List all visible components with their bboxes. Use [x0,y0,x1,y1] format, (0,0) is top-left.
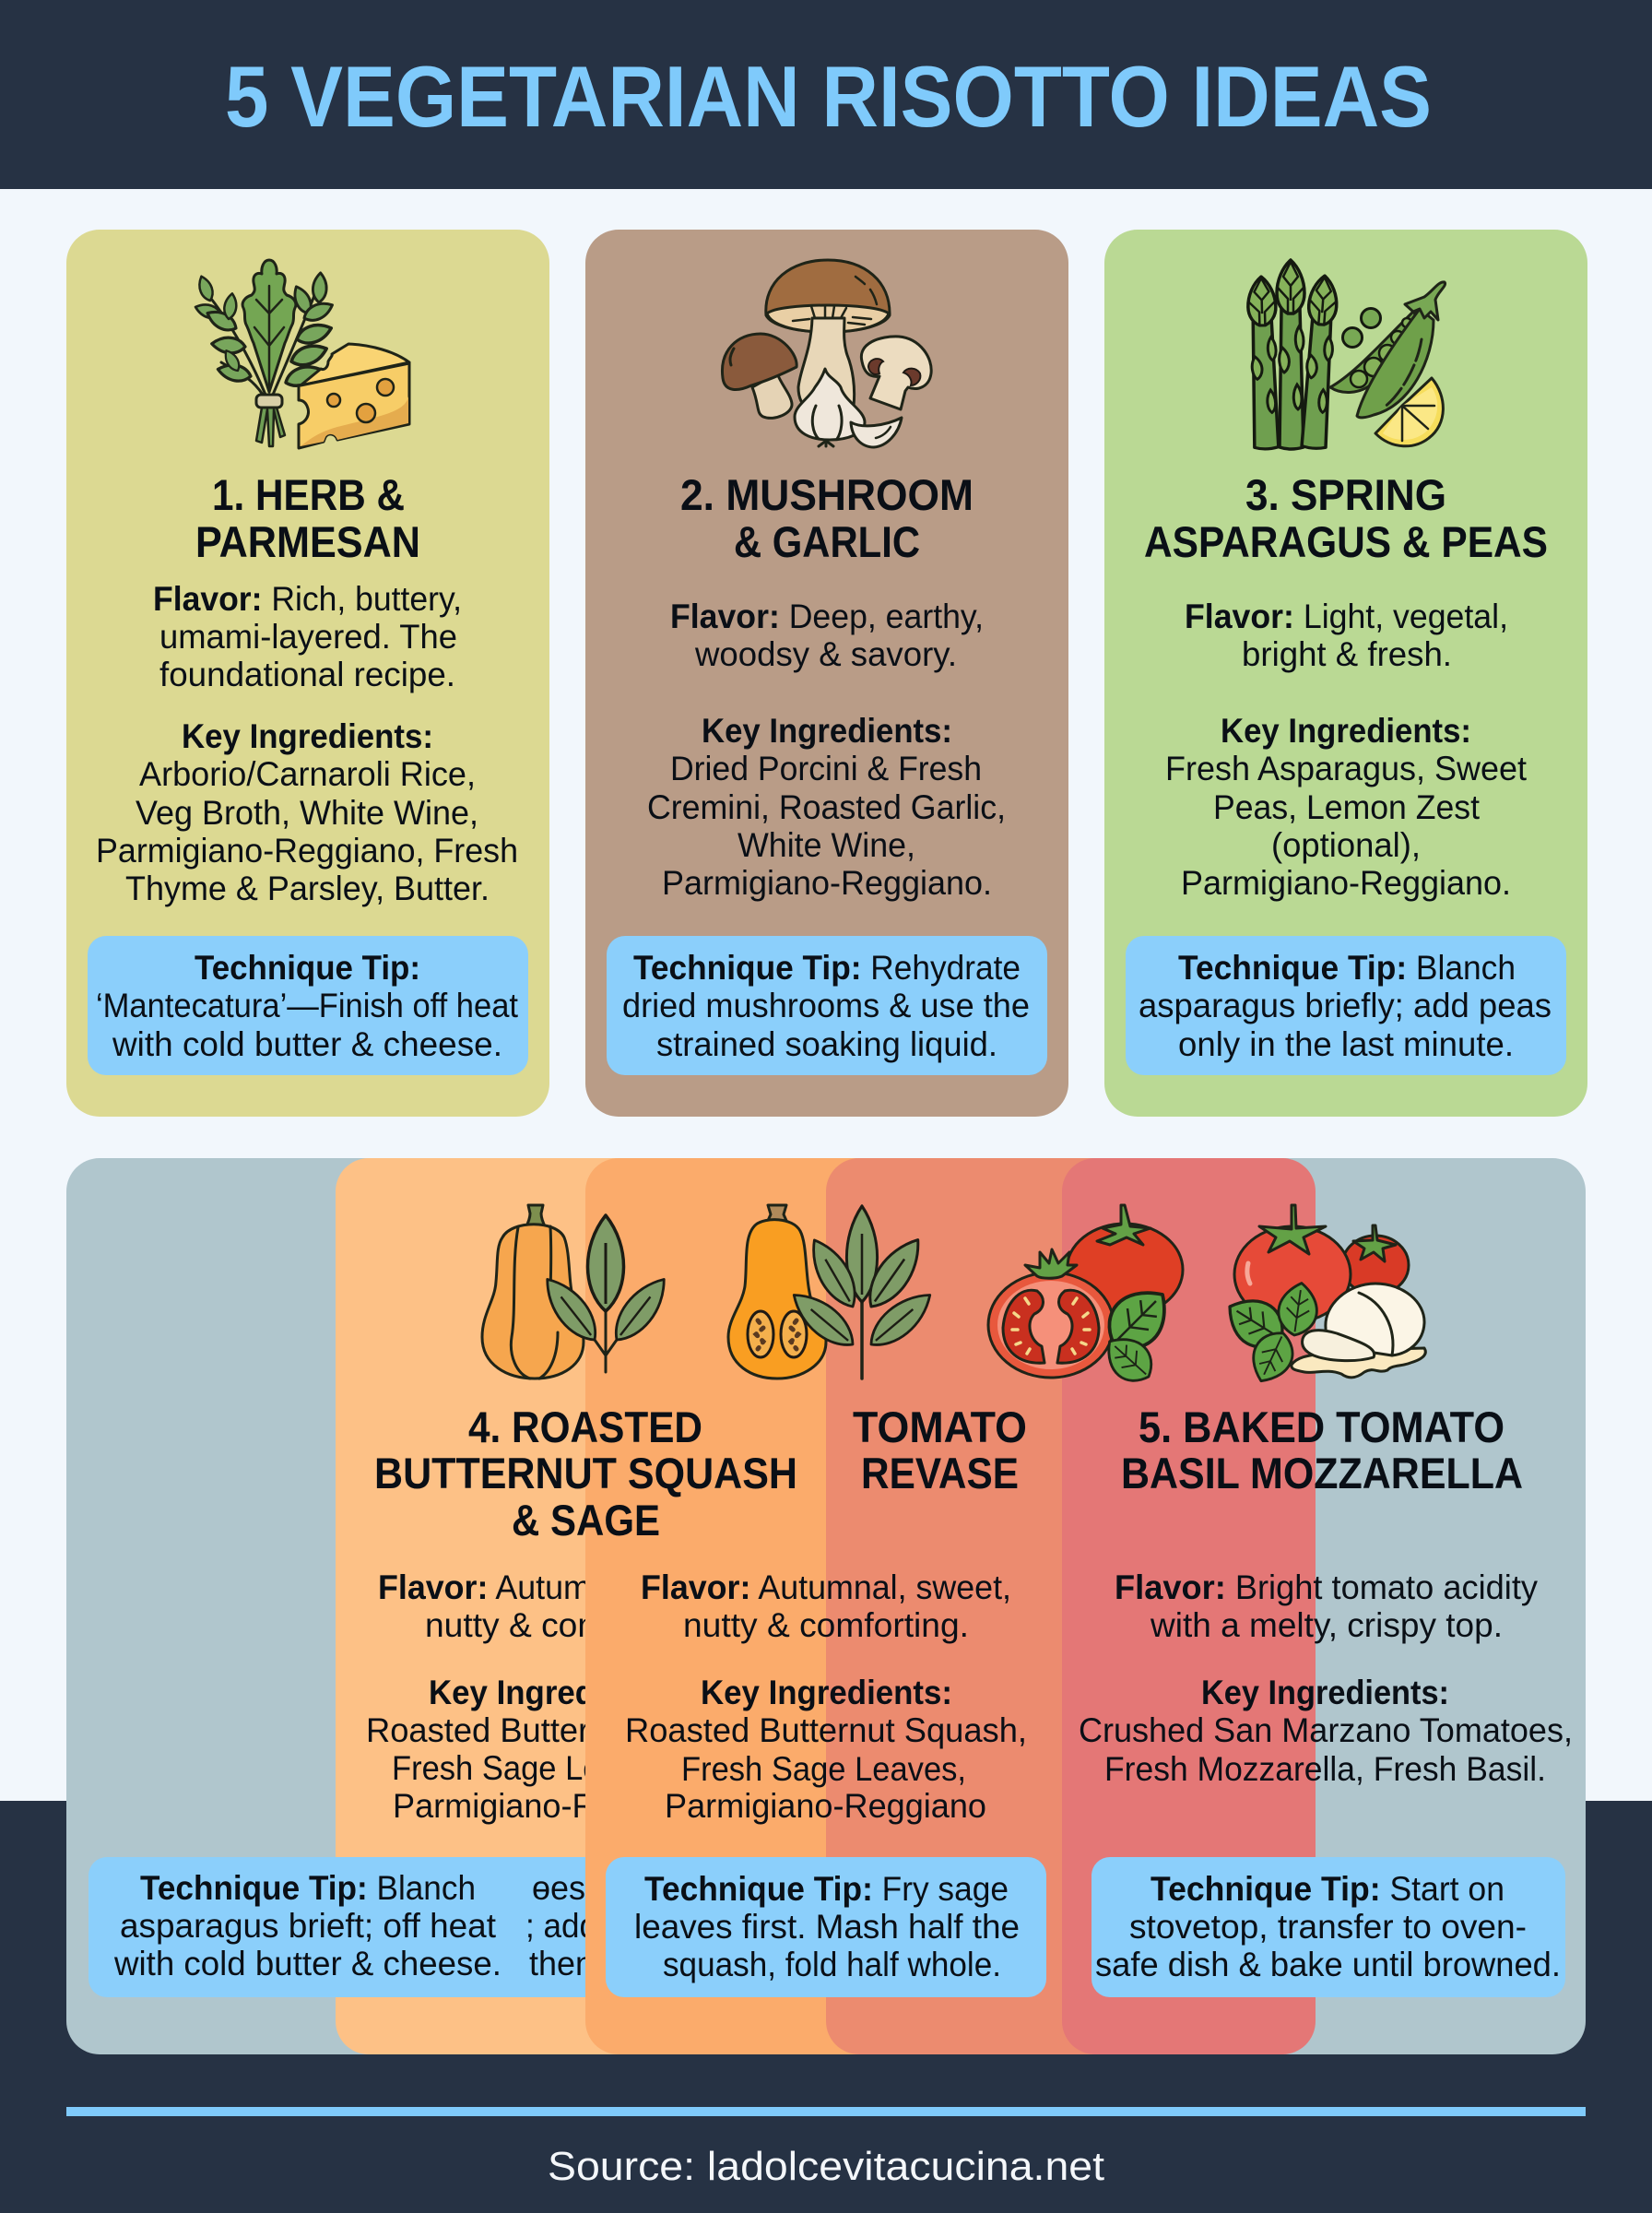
icon: mushrooms and garlic [722,260,931,447]
heading: tomato revase: TOMATO [853,1402,1027,1451]
technique tip [1126,936,1566,1075]
key ingredients: Peas, Lemon Zest [1213,788,1481,826]
flavor text: baked tomato: with a melty, crispy top. [1150,1606,1503,1644]
heading: roasted butternut squash and sage: & SAGE [512,1496,660,1544]
heading [1144,470,1548,566]
lower dark band [0,1801,1652,2213]
technique tip: ‘Mantecatura’—Finish off heat [96,987,519,1024]
technique tip: baked tomato [1092,1857,1565,1997]
key ingredients: Cremini, Roasted Garlic, [647,788,1006,826]
panel: spring asparagus and peas card [1104,230,1587,1117]
flavor text: baked tomato [1115,1568,1538,1644]
panel: baked tomato card [1062,1158,1316,2054]
panel: roasted squash card, second layer [585,1158,890,2054]
key ingredients: (optional), [1271,826,1421,864]
clipped technique tip, first layer [88,1857,642,1997]
icon: herbs and cheese [194,260,409,448]
clipped flavor text, first layer: nutty & comforting. [425,1606,711,1644]
flavor text: Flavor: Light, vegetal, [1185,598,1508,635]
heading: ASPARAGUS & PEAS [1144,517,1548,566]
key ingredients: squash [625,1674,1027,1825]
key ingredients: White Wine, [738,826,915,864]
technique tip: baked tomato: Technique Tip: Start on [1150,1870,1504,1908]
technique tip: baked tomato: safe dish & bake until browned. [1095,1946,1561,1983]
key ingredients: Parmigiano-Reggiano. [1181,864,1511,902]
panel: bottom row background [66,1158,1586,2054]
icon: halved squash and sage [728,1205,939,1379]
key ingredients: Arborio/Carnaroli Rice, [139,755,476,793]
heading [195,470,420,566]
flavor text: Flavor: Rich, buttery, [153,580,462,618]
technique tip: strained soaking liquid. [656,1025,997,1063]
key ingredients [647,712,1006,902]
panel: mushroom and garlic card [585,230,1068,1117]
heading: 2. MUSHROOM [680,470,974,519]
clipped technique tip, first layer: Technique Tip: Blanch [140,1869,476,1907]
flavor text [1185,598,1508,673]
heading: tomato revase [853,1402,1027,1497]
key ingredients: Fresh Asparagus, Sweet [1165,750,1528,787]
clipped key ingredients, first layer: Fresh Sage Leaves, [392,1749,677,1787]
technique tip [88,936,528,1075]
key ingredients: Parmigiano-Reggiano, Fresh [96,832,518,870]
technique tip: Technique Tip: Rehydrate [633,949,1021,987]
key ingredients [1165,712,1528,902]
technique tip [607,936,1047,1075]
flavor text: squash: Flavor: Autumnal, sweet, [641,1568,1011,1606]
clipped technique tip, first layer: ; add [525,1907,597,1945]
technique tip: squash: leaves first. Mash half the [634,1908,1020,1946]
flavor text: umami-layered. The [159,618,457,656]
clipped technique tip, first layer: asparagus brieft; off heat [120,1907,497,1945]
clipped flavor text, first layer [378,1568,749,1644]
header band [0,0,1652,189]
flavor text: woodsy & savory. [694,635,957,673]
title: 5 VEGETARIAN RISOTTO IDEAS [225,48,1432,145]
heading [680,470,974,566]
flavor text: foundational recipe. [159,656,455,693]
flavor text: bright & fresh. [1242,635,1452,673]
heading: baked tomato basil mozzarella: BASIL MOZZARELLA [1121,1449,1523,1497]
heading: PARMESAN [195,517,420,566]
heading: roasted butternut squash and sage: 4. ROASTED [468,1402,702,1451]
icon: tomato halves and basil [988,1205,1183,1391]
key ingredients: Dried Porcini & Fresh [670,750,982,787]
panel: herb and parmesan card [66,230,549,1117]
heading: baked tomato basil mozzarella [1121,1402,1523,1497]
heading: 1. HERB & [212,470,405,519]
key ingredients: Parmigiano-Reggiano. [662,864,992,902]
flavor text [670,598,984,673]
key ingredients: Veg Broth, White Wine, [136,794,478,832]
key ingredients: Key Ingredients: [1221,712,1471,750]
panel: roasted squash card, first layer [336,1158,667,2054]
technique tip: squash: Technique Tip: Fry sage [644,1870,1009,1908]
key ingredients: squash: Fresh Sage Leaves, [681,1750,966,1788]
flavor text [153,580,462,693]
key ingredients: Key Ingredients: [702,712,952,750]
key ingredients: Key Ingredients: [182,717,433,755]
heading: baked tomato basil mozzarella: 5. BAKED TOMATO [1139,1402,1504,1451]
clipped key ingredients, first layer: Parmigiano-Reggiano [393,1787,714,1825]
heading: tomato revase: REVASE [861,1449,1019,1497]
heading: roasted butternut squash and sage [374,1402,797,1544]
icon: tomatoes, basil and mozzarella [1218,1205,1425,1389]
key ingredients: baked tomato [1079,1674,1573,1788]
flavor text: baked tomato: Flavor: Bright tomato acidity [1115,1568,1538,1606]
key ingredients: baked tomato: Fresh Mozzarella, Fresh Basil. [1104,1750,1546,1788]
source line: Source: ladolcevitacucina.net [548,2144,1104,2189]
technique tip: squash [606,1857,1046,1997]
key ingredients: squash: Parmigiano-Reggiano [665,1787,986,1825]
clipped technique tip, first layer: ɵes [532,1869,585,1907]
panel: tomato revase card [826,1158,1139,2054]
technique tip: baked tomato: stovetop, transfer to oven- [1129,1908,1527,1946]
clipped technique tip, first layer: with cold butter & cheese. [113,1945,502,1982]
key ingredients: squash: Key Ingredients: [701,1674,952,1711]
technique tip: dried mushrooms & use the [622,987,1030,1024]
flavor text: squash [641,1568,1011,1644]
clipped key ingredients, first layer: Roasted Butternut Squash, [366,1711,768,1749]
key ingredients: squash: Roasted Butternut Squash, [625,1711,1027,1749]
technique tip: asparagus briefly; add peas [1139,987,1552,1024]
icon: whole squash and sage [482,1205,676,1379]
heading: roasted butternut squash and sage: BUTTERNUT SQUASH [374,1449,797,1497]
clipped technique tip, first layer: then [529,1945,594,1982]
heading: & GARLIC [734,517,920,566]
icon: asparagus, peas and lemon [1247,260,1446,449]
key ingredients: baked tomato: Key Ingredients: [1201,1674,1449,1711]
heading: 3. SPRING [1245,470,1446,519]
key ingredients: Thyme & Parsley, Butter. [125,870,490,907]
flavor text: squash: nutty & comforting. [683,1606,969,1644]
technique tip: only in the last minute. [1178,1025,1514,1063]
footer rule [66,2107,1586,2116]
flavor text: Flavor: Deep, earthy, [670,598,984,635]
key ingredients [96,717,518,907]
clipped flavor text, first layer: Flavor: Autumnal, sweet, [378,1568,749,1606]
technique tip: squash: squash, fold half whole. [663,1946,1001,1983]
technique tip: Technique Tip: Blanch [1178,949,1516,987]
technique tip: with cold butter & cheese. [112,1025,502,1063]
technique tip: Technique Tip: [195,949,420,987]
key ingredients: baked tomato: Crushed San Marzano Tomatoes, [1079,1711,1573,1749]
clipped key ingredients, first layer: Key Ingredients: [429,1674,680,1711]
clipped key ingredients, first layer [366,1674,768,1825]
